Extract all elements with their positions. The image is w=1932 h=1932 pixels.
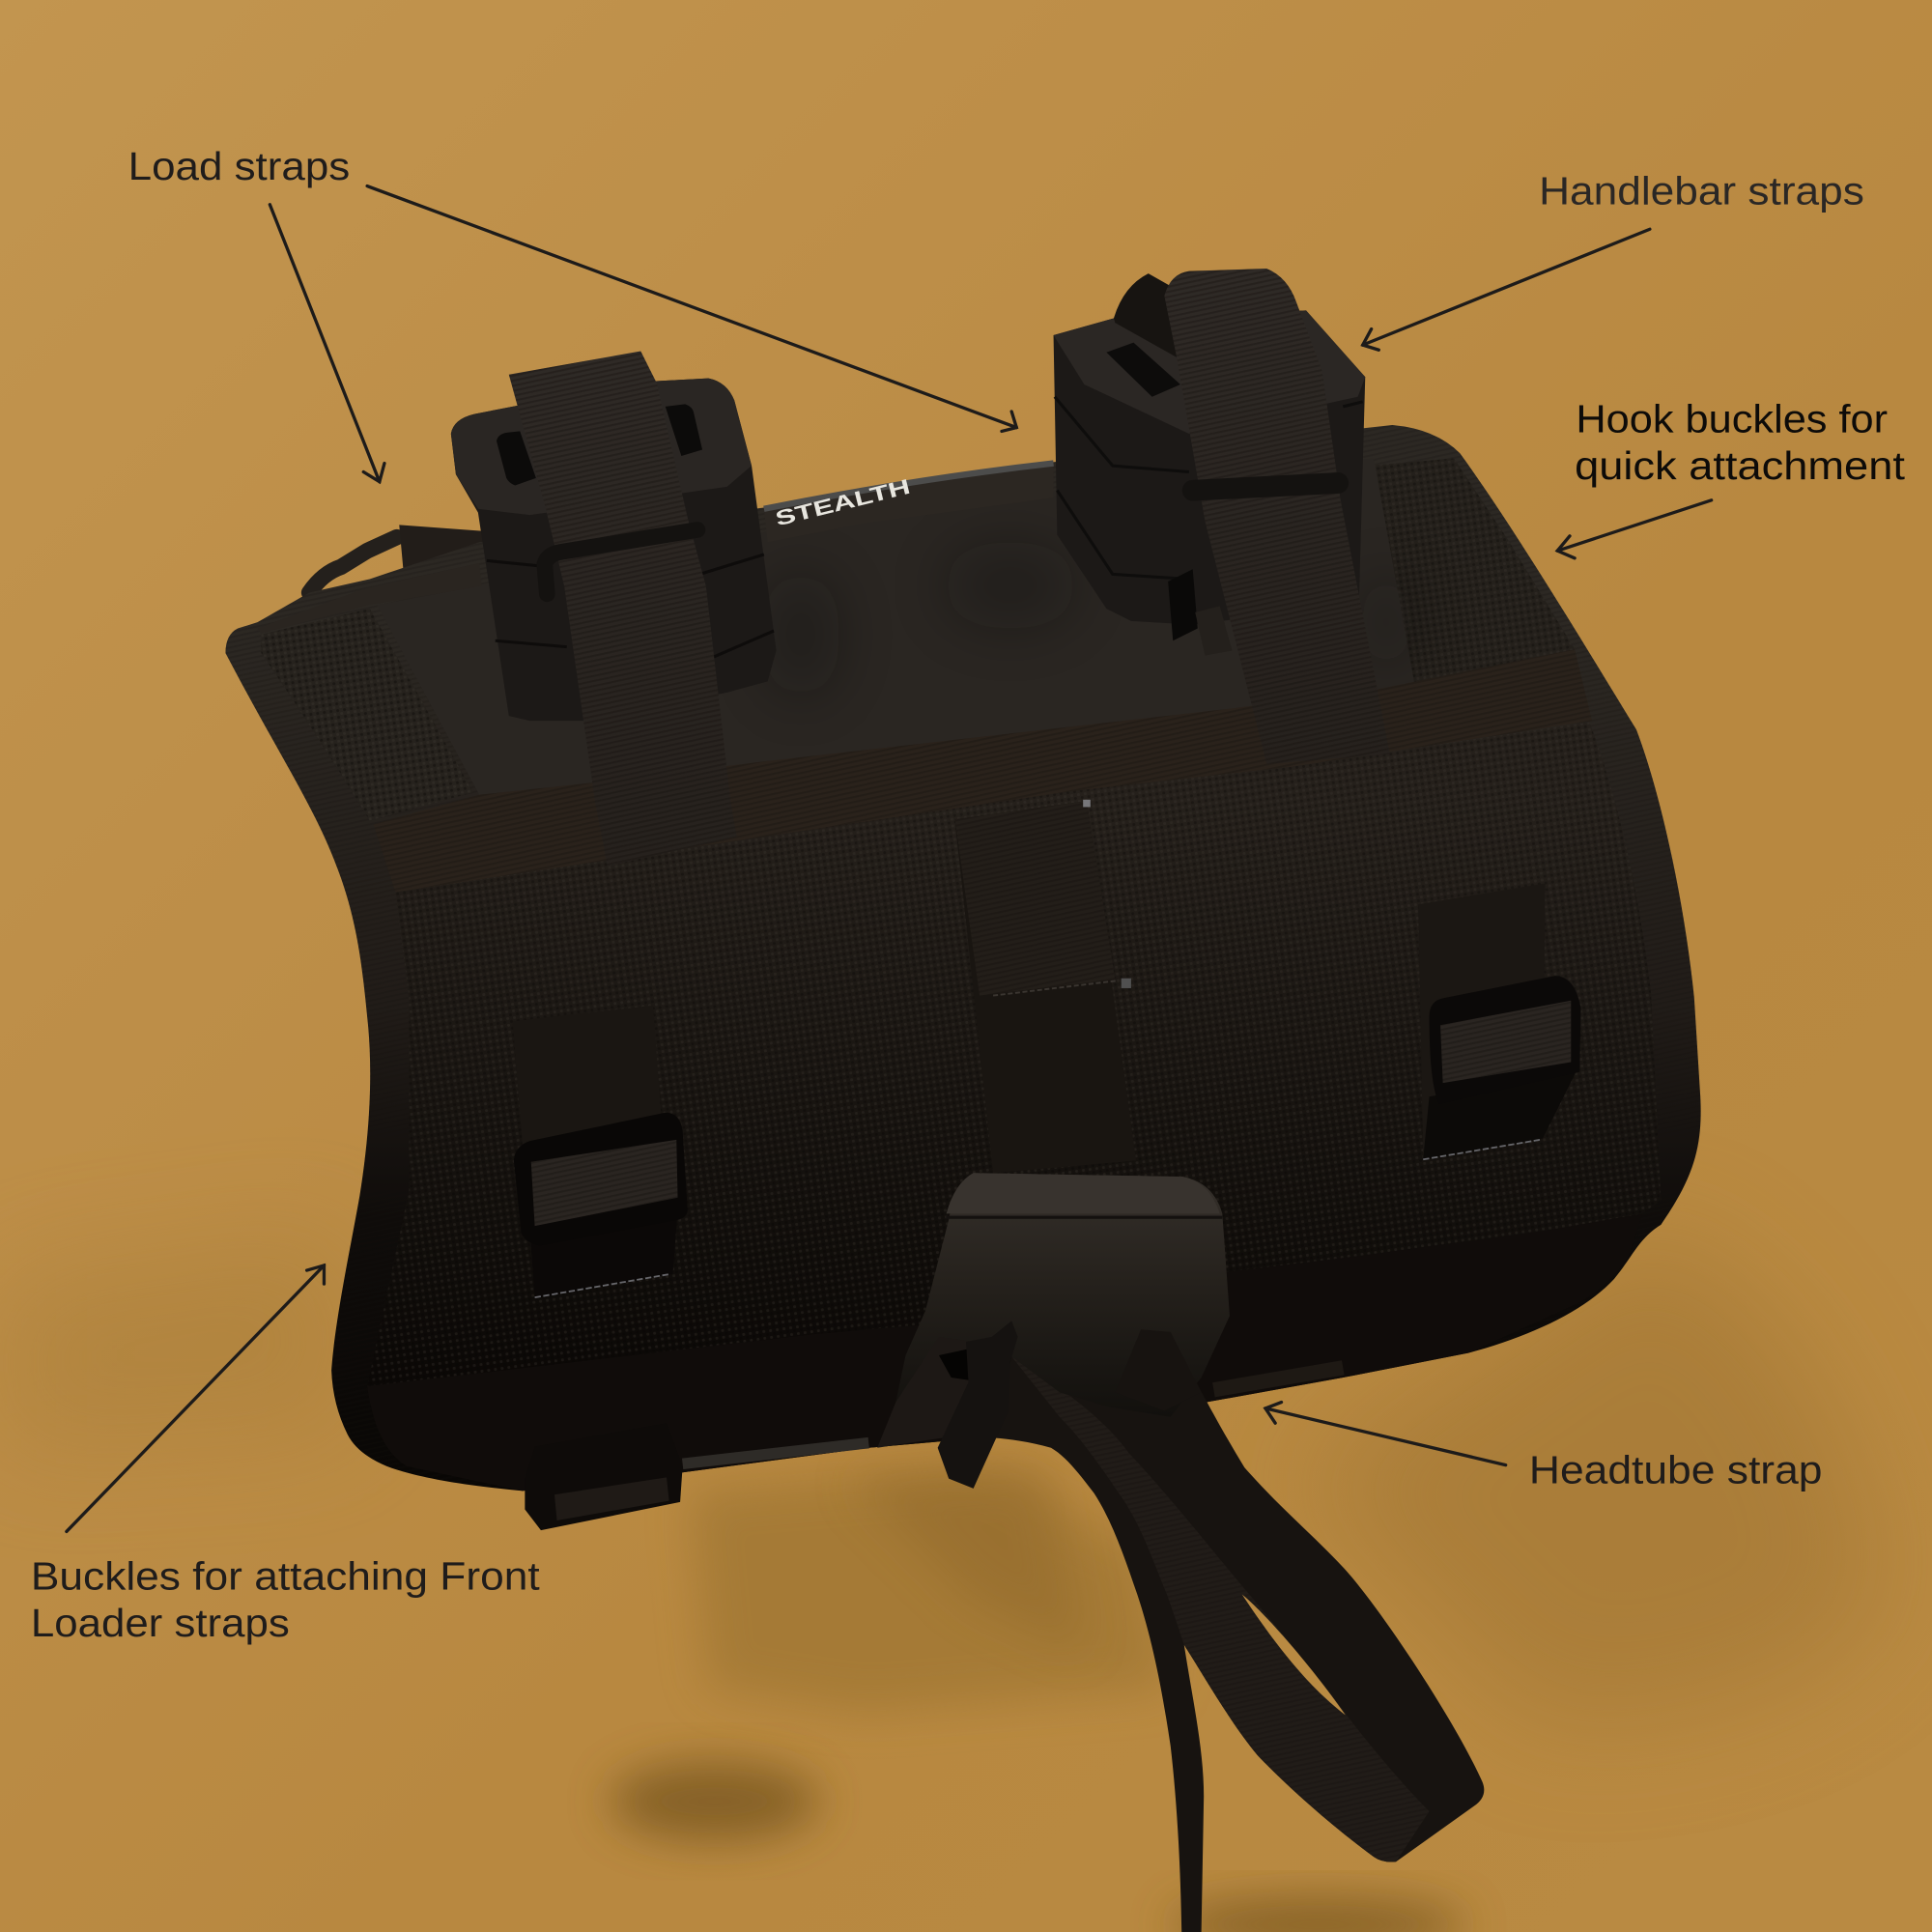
right strap keeper and buckle	[1418, 884, 1580, 1159]
left handlebar strap	[509, 352, 737, 867]
right strap slider	[1193, 483, 1338, 491]
arrow: headtube strap	[1265, 1403, 1506, 1465]
bag body silhouette	[210, 407, 1725, 1516]
label: front loader buckles: Loader straps	[31, 1601, 290, 1645]
right handlebar spacer block	[1054, 310, 1365, 625]
arrow: front loader buckles	[67, 1265, 324, 1531]
headtube straps	[994, 1329, 1484, 1932]
left strap slider	[545, 529, 697, 594]
right wing fabric	[1368, 458, 1575, 685]
label: hook buckles: quick attachment	[1575, 443, 1906, 488]
top binding edge	[764, 464, 1054, 509]
annotated bag illustration	[210, 269, 1725, 1932]
rear webbing strip	[258, 563, 482, 634]
logo band	[764, 462, 1054, 542]
cast shadows on backdrop	[0, 1233, 1886, 1932]
arrow: hook buckles	[1557, 500, 1712, 558]
label: headtube strap: Headtube strap	[1529, 1448, 1822, 1492]
smooth top panel	[377, 458, 1414, 795]
label: handlebar straps: Handlebar straps	[1539, 169, 1864, 213]
lower body fabric	[367, 722, 1661, 1386]
label: hook buckles: Hook buckles for	[1576, 397, 1888, 441]
left wing fabric	[261, 609, 473, 820]
right strap hook and tail	[1168, 569, 1233, 656]
headtube buckle block	[877, 1173, 1230, 1448]
bottom band	[367, 1213, 1642, 1491]
label: front loader buckles	[31, 1553, 540, 1645]
centre vertical strap	[955, 800, 1136, 1173]
label: hook buckles	[1575, 397, 1906, 488]
front webbing band	[373, 649, 1592, 892]
bottom left webbing buckle	[525, 1423, 683, 1530]
left strap keeper and buckle	[513, 1006, 688, 1298]
label: load straps: Load straps	[128, 144, 350, 188]
label: front loader buckles: Buckles for attaching Front	[31, 1553, 540, 1598]
arrow: handlebar straps	[1363, 229, 1650, 350]
shadows on top panel	[761, 541, 1413, 698]
left handlebar spacer block	[451, 379, 777, 721]
right handlebar strap	[1114, 269, 1390, 764]
hook at headtube strap	[938, 1321, 1018, 1489]
arrow: load straps to left	[270, 205, 384, 482]
arrow: load straps to right	[367, 186, 1016, 431]
hook buckle at rear left	[309, 525, 483, 593]
logo: STEALTH	[773, 474, 913, 530]
